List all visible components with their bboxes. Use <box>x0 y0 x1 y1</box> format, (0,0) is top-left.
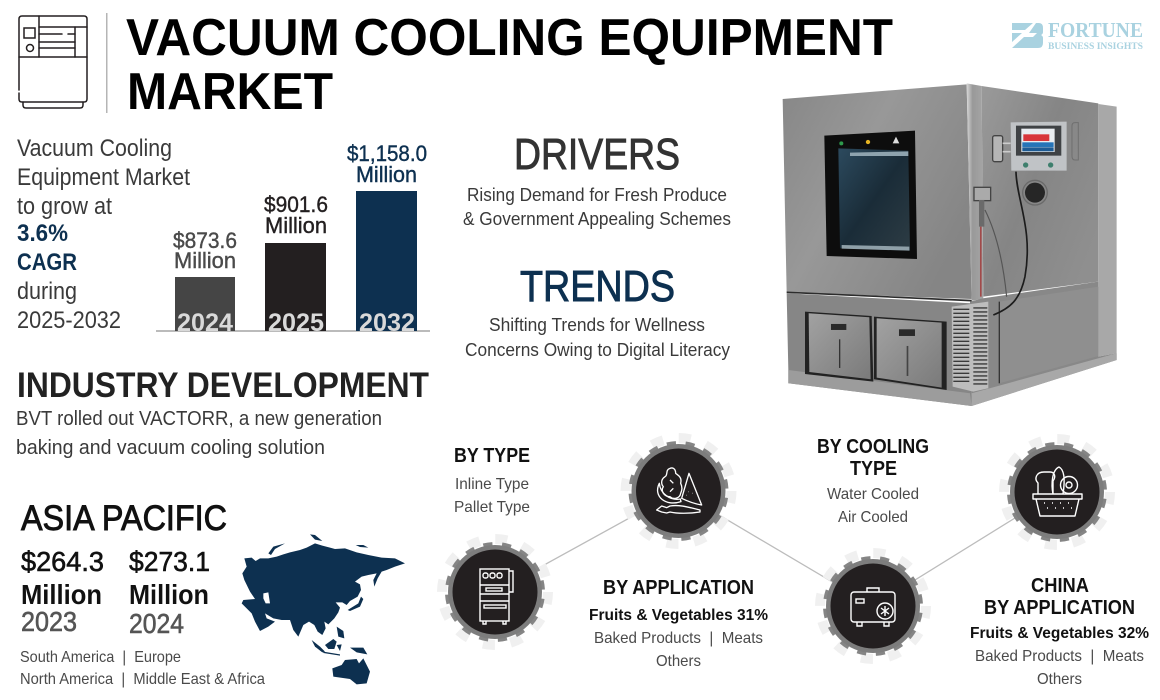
text: China by application: Fruits & Vegetables 32% <box>970 625 1149 642</box>
icon: vacuum cooler outline <box>19 16 87 108</box>
bar 2024: $873.6 <box>173 228 237 253</box>
text: by application: BY APPLICATION <box>603 577 754 599</box>
text: by cooling type: BY COOLING <box>817 436 929 458</box>
vent <box>952 302 988 392</box>
text: other regions: North America | Middle East & Africa <box>20 671 265 688</box>
text: by type: Pallet Type <box>454 499 530 516</box>
stat 2023 <box>21 546 104 637</box>
text: China by application: BY APPLICATION <box>984 597 1135 619</box>
stat 2024: 2024 <box>129 608 184 639</box>
panel: Asia Pacific: ASIA PACIFIC <box>21 499 227 538</box>
text: by cooling type: Air Cooled <box>838 509 908 526</box>
bar 2032 <box>347 141 427 337</box>
trends <box>465 262 730 360</box>
text: market growth statement: during <box>17 278 77 305</box>
drivers <box>463 130 731 229</box>
title: MARKET <box>127 63 333 121</box>
text: market growth statement: 2025-2032 <box>17 307 121 334</box>
window <box>824 131 917 259</box>
text: by type: Inline Type <box>455 476 529 493</box>
text: by application: Fruits & Vegetables 31% <box>589 607 768 624</box>
photo: vacuum cooling chamber <box>783 83 1117 406</box>
heading: industry development: INDUSTRY DEVELOPMENT <box>17 366 429 405</box>
bar 2024 <box>173 228 237 337</box>
drivers: DRIVERS <box>514 130 680 179</box>
text: by cooling type <box>817 436 929 526</box>
control panel <box>1011 122 1067 171</box>
heading: industry development <box>16 366 429 459</box>
logo: Fortune Business Insights: FORTUNE <box>1048 18 1143 42</box>
text: by application: Others <box>656 653 701 670</box>
bar 2025: $901.6 <box>264 192 328 217</box>
text: market growth statement: 3.6% <box>17 220 68 247</box>
icon: gear with cooling unit <box>820 553 926 659</box>
title: VACUUM COOLING EQUIPMENT <box>126 9 893 67</box>
stat 2023: 2023 <box>21 606 77 637</box>
text: by type: BY TYPE <box>454 445 530 467</box>
icon: gear with machine <box>442 539 548 645</box>
text: other regions <box>20 649 265 688</box>
bar 2032: $1,158.0 <box>347 141 427 166</box>
text: by application: Baked Products | Meats <box>594 630 763 647</box>
text: market growth statement: Equipment Market <box>17 164 190 191</box>
text: development detail: baking and vacuum cooling solution <box>16 437 325 459</box>
text: China by application <box>970 575 1149 688</box>
logo: Fortune Business Insights <box>1012 18 1143 52</box>
drivers: Rising Demand for Fresh Produce <box>467 185 727 205</box>
stat 2023: $264.3 <box>21 546 104 577</box>
stat 2024: $273.1 <box>129 546 210 577</box>
drivers: & Government Appealing Schemes <box>463 209 731 229</box>
text: development detail: BVT rolled out VACTORR, a new generation <box>16 408 382 430</box>
knob <box>1025 183 1045 203</box>
text: market growth statement: CAGR <box>17 249 77 276</box>
text: market growth statement: to grow at <box>17 193 112 220</box>
bar 2032: 2032 <box>359 309 415 337</box>
panel: Asia Pacific <box>20 499 265 688</box>
stat 2024: Million <box>129 579 209 610</box>
cables <box>993 172 1027 315</box>
drawers <box>805 312 873 382</box>
text: by application <box>589 577 768 670</box>
bar 2025: 2025 <box>268 309 324 337</box>
bar 2032: Million <box>356 162 417 187</box>
bar 2025 <box>264 192 328 337</box>
hinge and latch <box>993 136 1003 162</box>
text: by cooling type: Water Cooled <box>827 486 919 503</box>
text: market growth statement: Vacuum Cooling <box>17 135 172 162</box>
trends: Concerns Owing to Digital Literacy <box>465 340 730 360</box>
bar 2024: Million <box>174 248 236 273</box>
bar 2024: 2024 <box>177 309 233 337</box>
upper front face <box>783 84 972 299</box>
upper side face <box>982 86 1098 297</box>
text: China by application: Others <box>1037 671 1082 688</box>
text: development detail <box>16 408 382 459</box>
stat 2024 <box>129 546 210 639</box>
icon: gear with fruits and vegetables <box>625 438 732 544</box>
bar chart: market size <box>156 141 430 337</box>
connector lines <box>495 491 1057 606</box>
icon: gear with baked goods <box>1004 439 1110 545</box>
trends: Shifting Trends for Wellness <box>489 315 705 335</box>
text: market growth statement <box>17 135 190 334</box>
title <box>126 9 893 121</box>
text: China by application: Baked Products | Meats <box>975 648 1144 665</box>
text: by type <box>454 445 530 516</box>
vertical divider <box>106 13 108 113</box>
stat 2023: Million <box>21 579 102 610</box>
trends: TRENDS <box>520 262 675 311</box>
logo: Fortune Business Insights: BUSINESS INSIGHTS <box>1048 42 1143 52</box>
text: other regions: South America | Europe <box>20 649 181 666</box>
lower front face <box>787 293 972 406</box>
bar 2025: Million <box>265 213 327 238</box>
text: China by application: CHINA <box>1031 575 1089 597</box>
text: by cooling type: TYPE <box>850 458 897 480</box>
map: Asia Pacific <box>242 534 405 684</box>
